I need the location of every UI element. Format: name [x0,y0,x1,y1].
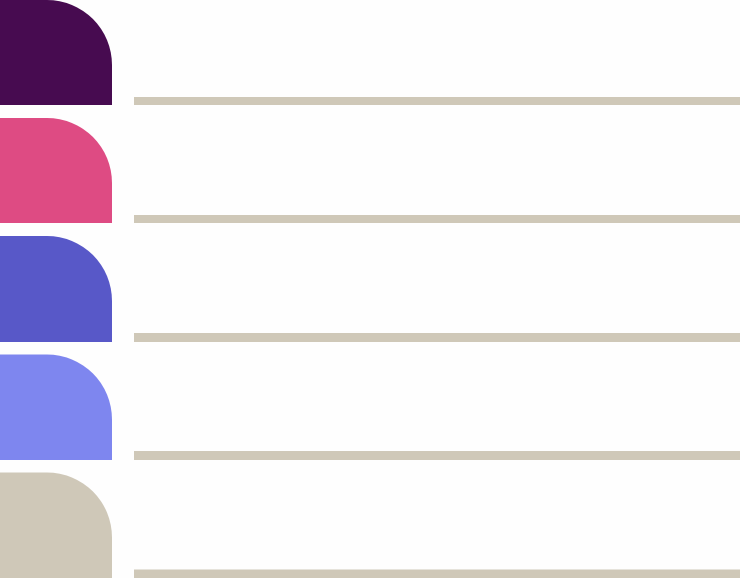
tab: beige [0,472,112,578]
row 3: indigo tab and rule [0,236,740,342]
rule: row 3 [134,333,740,342]
tab: pink [0,118,112,223]
rule: row 2 [134,215,740,223]
tab: indigo [0,236,112,342]
row 1: dark purple tab and rule [0,0,740,105]
rule: row 1 [134,97,740,105]
row 2: pink tab and rule [0,118,740,223]
tab: periwinkle [0,354,112,460]
tab: dark purple [0,0,112,105]
rule: row 4 [134,451,740,460]
row 5: beige tab and rule [0,472,740,578]
rule: row 5 [134,570,740,578]
row 4: periwinkle tab and rule [0,354,740,460]
